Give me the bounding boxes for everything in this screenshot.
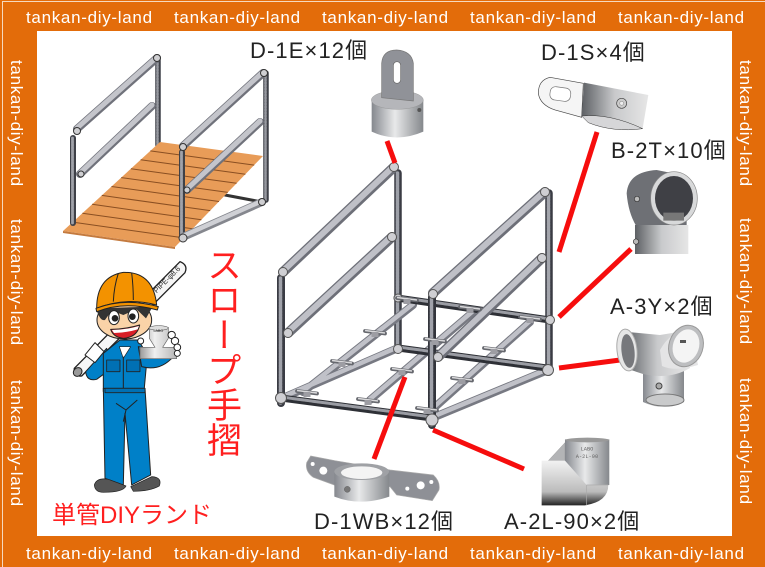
- hand: [138, 331, 181, 356]
- brand: tankan DIY land: 単管DIYランド: [52, 502, 212, 529]
- watermark border: right: tankan-diy-land: [736, 218, 755, 345]
- watermark border: top: tankan-diy-land: [174, 8, 301, 27]
- watermark border: right: tankan-diy-land: [736, 60, 755, 187]
- watermark border: bottom: tankan-diy-land: [618, 544, 745, 563]
- rear rail posts: [155, 60, 161, 145]
- red leader lines: [374, 132, 631, 469]
- pants: [103, 388, 151, 485]
- stringers and bottom: [285, 305, 548, 418]
- watermark border: left: [7, 60, 26, 507]
- pipe: [72, 262, 186, 378]
- watermark border: top: tankan-diy-land: [618, 8, 745, 27]
- helmet: [97, 272, 157, 308]
- diagram: pipe frame assembly: [280, 167, 550, 425]
- right front post: [428, 297, 436, 425]
- part: D-1E: [371, 50, 423, 137]
- watermark border: top: tankan-diy-land: [470, 8, 597, 27]
- right arm: [138, 347, 173, 368]
- watermark border: left: tankan-diy-land: [7, 380, 26, 507]
- watermark border: left: tankan-diy-land: [7, 60, 26, 187]
- watermark border: bottom: tankan-diy-land: [322, 544, 449, 563]
- fitting stamp: LABO: [581, 447, 593, 453]
- label: D-1WB: D-1WB×12個: [314, 509, 454, 534]
- head: [97, 301, 152, 339]
- watermark border: right: tankan-diy-land: [736, 378, 755, 505]
- label: D-1S: D-1S×4個: [541, 40, 646, 65]
- joints and clamps: [276, 162, 554, 426]
- part: A-2L-90: [542, 438, 609, 505]
- photo: finished slope handrail with wooden deck: [63, 54, 268, 249]
- torso: [103, 340, 147, 392]
- watermark border: bottom: tankan-diy-land: [470, 544, 597, 563]
- mascot: worker in blue overalls with hard hat, pipe and fitting: [72, 262, 186, 492]
- rear left post and rails: [394, 173, 402, 350]
- left front post: [277, 278, 285, 403]
- left arm: [86, 348, 112, 380]
- title: slope handrail (vertical): スロープ手摺: [202, 247, 241, 457]
- watermark border: top: [26, 8, 745, 27]
- shoes: [94, 479, 126, 492]
- mascot: worker in blue overalls with hard hat, pipe and fitting: LABO: [153, 329, 163, 333]
- watermark border: bottom: tankan-diy-land: [174, 544, 301, 563]
- part: D-1S: [538, 77, 648, 130]
- label: A-3Y: A-3Y×2個: [610, 294, 714, 319]
- pipe: PIPE-φ8.6: [152, 264, 182, 295]
- part: A-2L-90: A-2L-90: [576, 454, 598, 460]
- part: D-1WB: [306, 456, 439, 502]
- watermark border: top: tankan-diy-land: [322, 8, 449, 27]
- part: A-3Y: [615, 321, 709, 407]
- watermark border: bottom: tankan-diy-land: [26, 544, 153, 563]
- watermark border: bottom: [26, 544, 745, 563]
- held fitting: [140, 327, 177, 359]
- label: B-2T: B-2T×10個: [611, 138, 727, 163]
- label: A-2L-90: A-2L-90×2個: [504, 509, 640, 534]
- label: D-1E: D-1E×12個: [250, 38, 368, 63]
- sloping rails: [283, 168, 545, 357]
- watermark border: right: [736, 60, 755, 505]
- part: B-2T: [627, 170, 697, 254]
- watermark border: top: tankan-diy-land: [26, 8, 153, 27]
- watermark border: left: tankan-diy-land: [7, 219, 26, 346]
